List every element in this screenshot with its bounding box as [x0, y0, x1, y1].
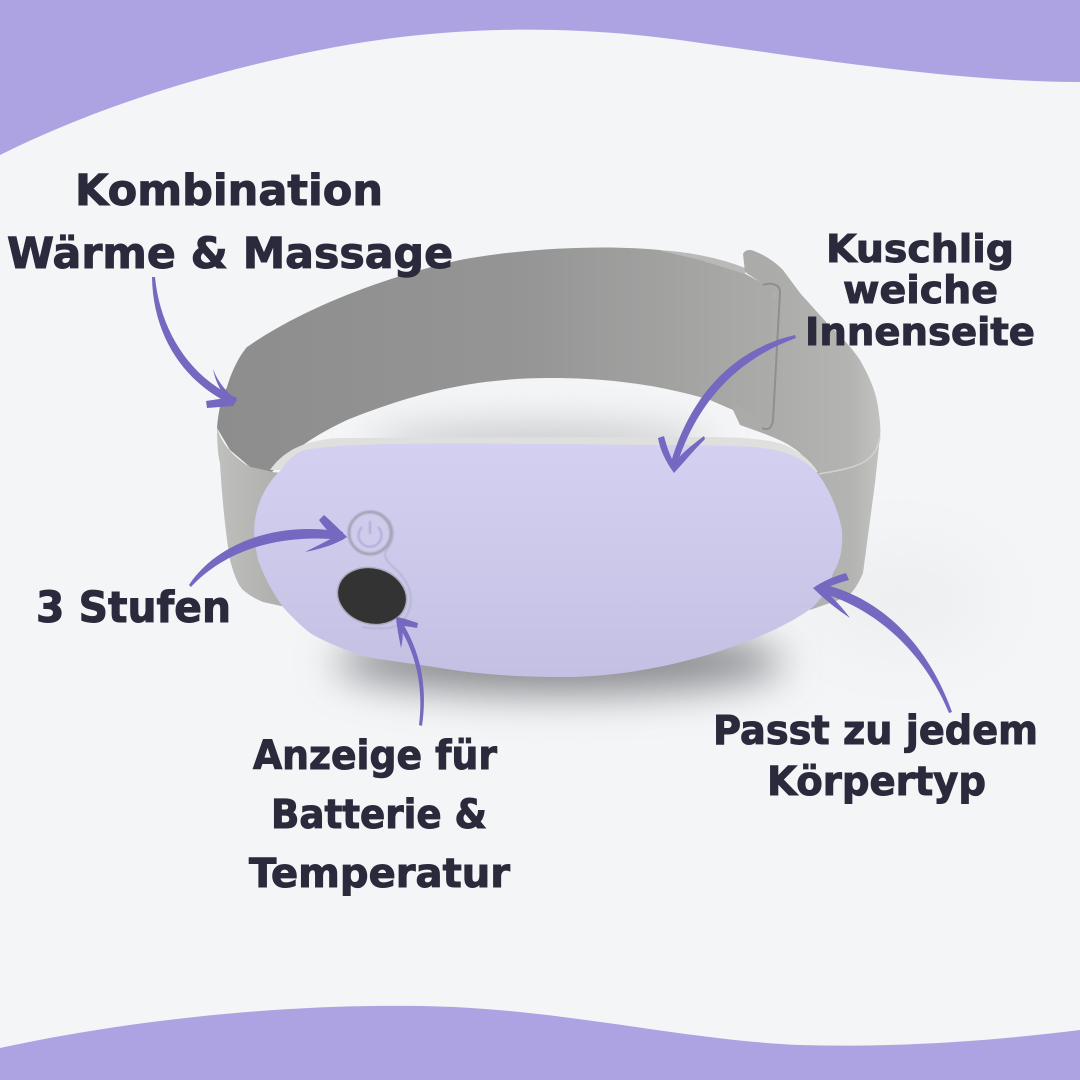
strap right fold highlight [819, 437, 880, 474]
label: Passt zu jedem Körpertyp: Passt zu jedem [713, 708, 1038, 754]
bottom wave [0, 1006, 1080, 1080]
label: Kuschlig weiche Innenseite [805, 227, 1035, 354]
power button [349, 511, 411, 628]
strap left front band [217, 420, 300, 608]
buckle slot line [762, 284, 780, 429]
label: Kombination Wärme & Massage: Wärme & Massage [7, 229, 453, 279]
strap right band and buckle [733, 250, 880, 610]
label: Kuschlig weiche Innenseite: Innenseite [805, 310, 1035, 354]
product: massage belt [217, 247, 990, 694]
arrow: to display [396, 617, 424, 726]
silver device rim [270, 437, 818, 472]
label: Passt zu jedem Körpertyp [713, 708, 1038, 805]
device body [254, 444, 842, 677]
strap end strip [658, 250, 745, 274]
floor shadow [335, 427, 990, 694]
label: 3 Stufen: 3 Stufen [36, 583, 231, 633]
label: Passt zu jedem Körpertyp: Körpertyp [767, 759, 986, 805]
arrow: to body [813, 573, 952, 713]
label: Anzeige für Batterie & Temperatur: Temperatur [249, 851, 510, 897]
arrow: to inner side [658, 335, 796, 473]
label: Kombination Wärme & Massage [7, 166, 453, 279]
label: Anzeige für Batterie & Temperatur [249, 733, 510, 897]
display [331, 560, 413, 632]
top wave [0, 0, 1080, 155]
arrow: to strap [152, 277, 237, 408]
strap inner face [217, 247, 775, 472]
label: Anzeige für Batterie & Temperatur: Anzeige für [253, 733, 497, 779]
label: Anzeige für Batterie & Temperatur: Batterie & [271, 792, 487, 838]
label: Kuschlig weiche Innenseite: weiche [843, 268, 998, 312]
label: Kuschlig weiche Innenseite: Kuschlig [826, 227, 1014, 271]
label: Kombination Wärme & Massage: Kombination [75, 166, 383, 216]
arrow: to power button [189, 515, 347, 587]
